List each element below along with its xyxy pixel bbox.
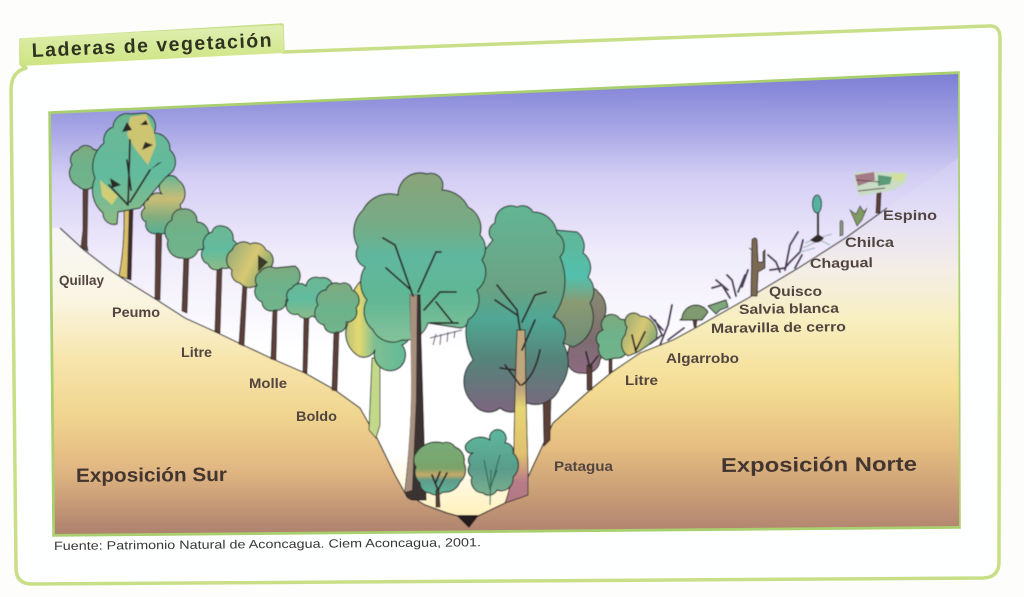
tree: third <box>141 176 185 234</box>
label: Exposición Norte: Exposición Norte <box>721 454 917 477</box>
illustration: valley cross-section <box>40 60 970 540</box>
labels: south-facing species: Molle <box>249 376 288 391</box>
bush: maravilla <box>680 305 708 327</box>
tree: espino <box>854 172 908 213</box>
panel: illustration frame <box>50 73 959 535</box>
labels: south-facing species <box>59 273 337 424</box>
tree: eighth <box>286 277 334 373</box>
labels: north-facing species: Quisco <box>769 284 822 299</box>
ground outline <box>60 208 887 516</box>
label: Patagua: Patagua <box>554 459 614 474</box>
tree: fourth <box>165 209 209 313</box>
tree: teal background <box>555 230 594 347</box>
slope: south-facing ground <box>40 228 470 540</box>
labels: south-facing species: Quillay <box>59 273 104 288</box>
sky <box>51 74 958 516</box>
shrub: chilca <box>850 206 867 226</box>
labels: north-facing species: Chagual <box>810 255 873 271</box>
plant: chagual tall <box>800 195 832 252</box>
labels: north-facing species: Maravilla de cerro <box>711 319 846 336</box>
labels: north-facing species: Salvia blanca <box>739 301 840 317</box>
source note: Fuente: Patrimonio Natural de Aconcagua. Ciem Aconcagua, 2001. <box>54 535 481 553</box>
bush: salvia <box>708 300 728 314</box>
tree: large with yellow patches <box>92 113 175 280</box>
tree: peumo tall trunk behind <box>155 222 162 300</box>
tree: litre 2 <box>622 313 657 356</box>
shrub: chagual branches <box>768 232 803 272</box>
title tab <box>20 25 284 66</box>
tree: purple background <box>567 288 607 390</box>
tree: seventh <box>255 266 300 360</box>
shrub: low left <box>414 442 466 507</box>
tree: quillay small <box>69 145 102 251</box>
tree: litre 1 <box>595 313 627 374</box>
labels: north-facing species: Chilca <box>845 235 895 250</box>
shrub: quisco branches <box>712 270 748 298</box>
labels: south-facing species: Peumo <box>112 305 160 320</box>
labels: south-facing species: Litre <box>181 345 213 360</box>
stream <box>456 515 479 528</box>
labels: north-facing species: Litre <box>625 373 659 388</box>
labels: north-facing species: Algarrobo <box>666 351 739 366</box>
tree: fifth <box>201 226 239 333</box>
tree: yellow-green left of centre <box>346 272 410 438</box>
slope: north-facing ground <box>458 150 970 540</box>
tree: background trunk <box>543 395 551 446</box>
tree: ninth <box>315 283 359 391</box>
cactus: quisco <box>749 238 765 296</box>
shrub: low right <box>465 430 518 505</box>
trees: north-facing slope <box>596 172 908 373</box>
tree: big central <box>354 173 486 500</box>
labels: south-facing species: Boldo <box>296 409 337 424</box>
shrub: algarrobo <box>650 305 684 345</box>
label: Exposición Sur: Exposición Sur <box>76 464 227 487</box>
tree: right central <box>464 206 568 503</box>
plant: small cactus <box>840 220 843 236</box>
tree: sixth <box>227 242 273 346</box>
trees: south-facing slope row <box>69 113 359 391</box>
labels: north-facing species <box>625 208 937 388</box>
heading: Laderas de vegetación <box>31 30 272 62</box>
labels: north-facing species: Espino <box>883 208 937 223</box>
